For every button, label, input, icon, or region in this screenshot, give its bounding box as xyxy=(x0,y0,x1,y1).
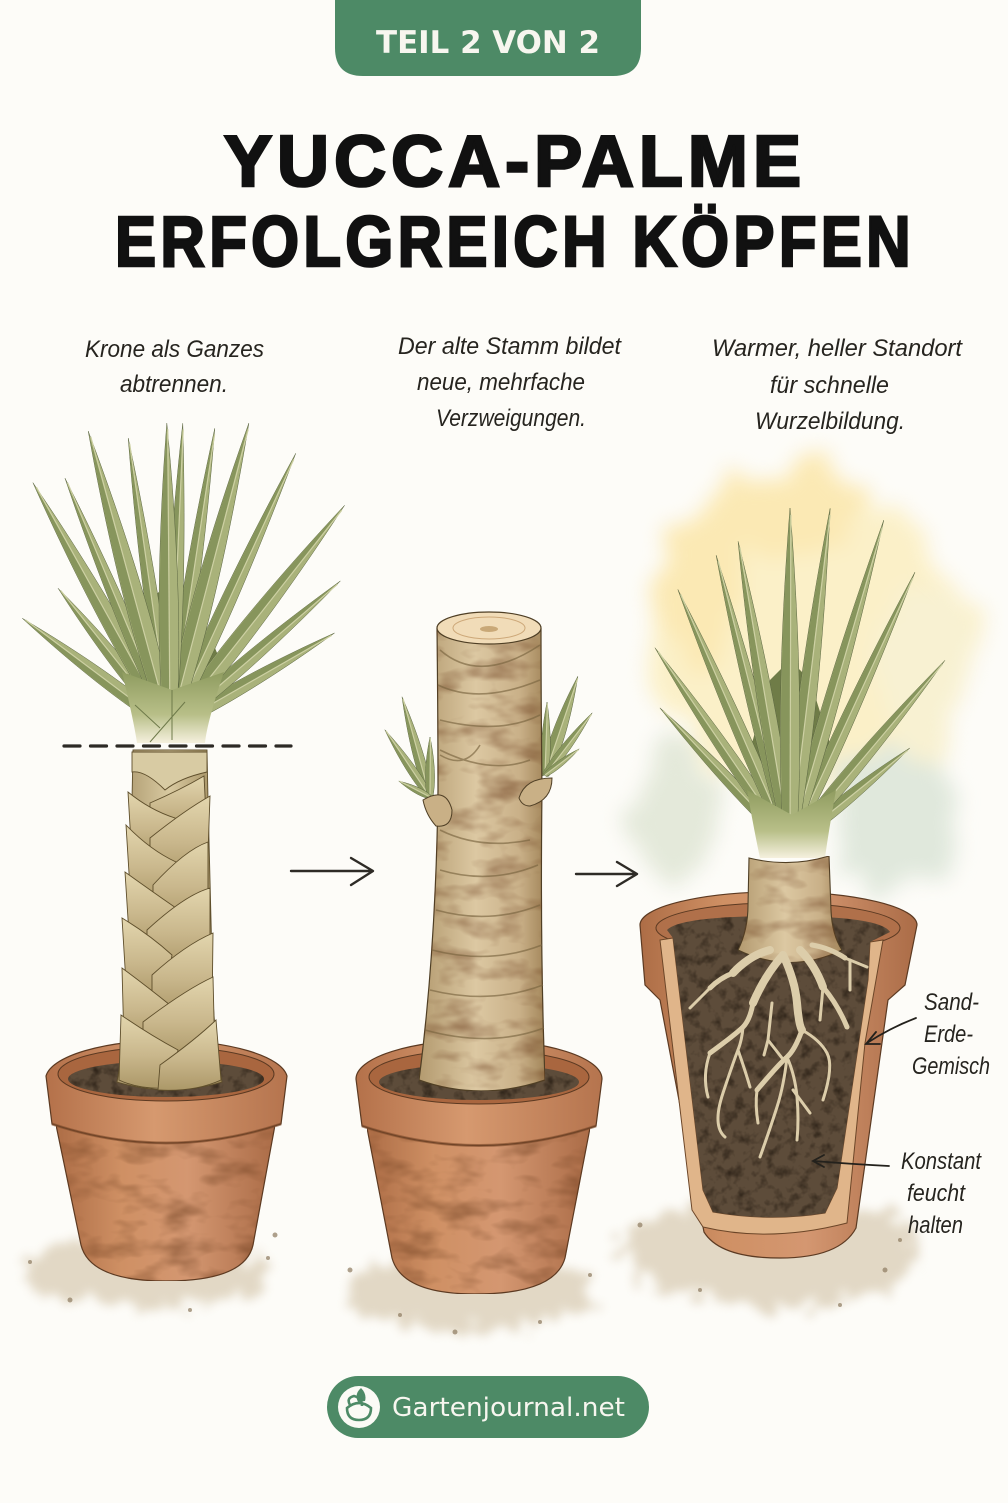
crown leaves xyxy=(18,420,352,743)
title xyxy=(115,122,915,282)
crown leaves xyxy=(649,507,950,858)
leader: keep moist xyxy=(813,1155,889,1167)
label: keep constantly moist: halten xyxy=(908,1212,963,1239)
caption: step 2: Der alte Stamm bildet xyxy=(398,333,622,360)
caption: step 3: für schnelle xyxy=(770,372,889,399)
trunk xyxy=(419,612,552,1091)
arrow: step 2 to step 3 xyxy=(576,862,637,886)
leader: sand-soil mix xyxy=(866,1018,916,1044)
title: YUCCA-PALME xyxy=(224,122,806,202)
part badge xyxy=(335,0,641,76)
caption: step 3: Wurzelbildung. xyxy=(755,408,905,435)
part badge: TEIL 2 VON 2 xyxy=(376,25,600,61)
label: sand-soil mix: Erde- xyxy=(924,1021,973,1048)
label: sand-soil mix xyxy=(912,989,990,1080)
caption: step 2 xyxy=(398,333,622,432)
shoots xyxy=(381,674,596,800)
icon: plant in bowl xyxy=(338,1386,380,1428)
label: keep constantly moist: feucht xyxy=(907,1180,966,1207)
label: keep constantly moist xyxy=(901,1148,982,1239)
caption: step 3 xyxy=(712,335,963,435)
roots xyxy=(690,945,867,1157)
caption: step 2: neue, mehrfache xyxy=(417,369,585,396)
illustration 1: yucca with crown xyxy=(18,420,352,1281)
watercolor glow behind plant 3 xyxy=(630,465,970,895)
footer brand pill: Gartenjournal.net xyxy=(392,1393,625,1423)
caption: step 1: abtrennen. xyxy=(120,371,228,398)
caption: step 3: Warmer, heller Standort xyxy=(712,335,963,362)
cut line xyxy=(64,744,291,748)
caption: step 2: Verzweigungen. xyxy=(436,405,586,432)
label: keep constantly moist: Konstant xyxy=(901,1148,982,1175)
neck xyxy=(738,856,842,962)
footer brand pill xyxy=(327,1376,649,1438)
illustration 2: cut trunk with new shoots xyxy=(356,612,602,1294)
cut-away pot xyxy=(640,892,917,1258)
caption: step 1 xyxy=(85,336,264,398)
pot xyxy=(46,1041,287,1281)
label: sand-soil mix: Sand- xyxy=(924,989,979,1016)
pot xyxy=(356,1040,602,1294)
illustration 3: repotted top in cross-section pot xyxy=(640,507,950,1258)
arrow: step 1 to step 2 xyxy=(291,858,373,885)
caption: step 1: Krone als Ganzes xyxy=(85,336,264,363)
trunk with overlapping leaf scales xyxy=(117,750,222,1090)
label: sand-soil mix: Gemisch xyxy=(912,1053,990,1080)
ground stains xyxy=(20,1197,920,1334)
